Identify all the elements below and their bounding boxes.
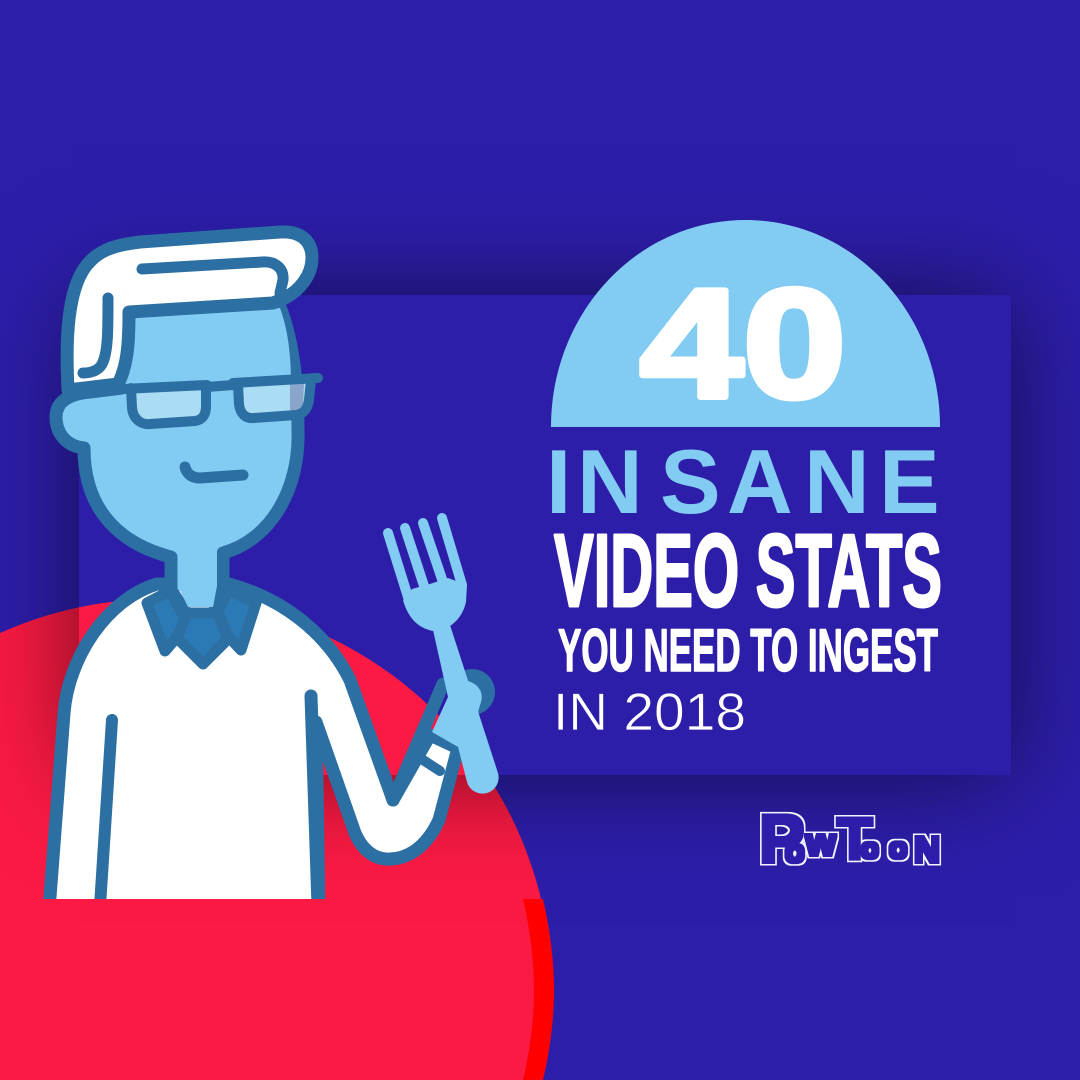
body and shirt bbox=[49, 584, 458, 910]
mouth bbox=[185, 467, 243, 478]
heading: in 2018: IN 2018 bbox=[553, 683, 746, 742]
number 40: 40 bbox=[640, 257, 846, 430]
character with fork bbox=[43, 225, 499, 899]
logo: powtoon: o bbox=[861, 833, 879, 865]
head bbox=[56, 232, 318, 612]
thumb bbox=[468, 681, 482, 712]
semicircle badge bbox=[551, 220, 940, 427]
panel shadow bbox=[79, 295, 1011, 775]
hand bbox=[393, 669, 495, 800]
logo: powtoon: P bbox=[759, 801, 804, 877]
right side line bbox=[311, 696, 318, 906]
fork bbox=[388, 518, 499, 794]
fork head bbox=[403, 578, 467, 631]
glasses bbox=[122, 378, 318, 424]
logo: powtoon: o bbox=[785, 833, 805, 869]
hair strand top bbox=[142, 262, 283, 293]
cuff line bbox=[420, 758, 440, 771]
logo: powtoon: N bbox=[914, 829, 940, 870]
collar bbox=[147, 590, 256, 664]
fork tines bbox=[388, 518, 462, 597]
logo: powtoon: o bbox=[889, 832, 907, 865]
neck fill bbox=[180, 550, 217, 607]
heading: insane: INSANE bbox=[546, 432, 940, 533]
left arm line bbox=[100, 720, 112, 906]
logo: powtoon: w bbox=[805, 822, 836, 864]
logo: powtoon: T bbox=[837, 807, 872, 872]
hair strand left bbox=[83, 298, 108, 373]
face fill under hair bbox=[122, 308, 291, 394]
hair bbox=[67, 232, 312, 390]
